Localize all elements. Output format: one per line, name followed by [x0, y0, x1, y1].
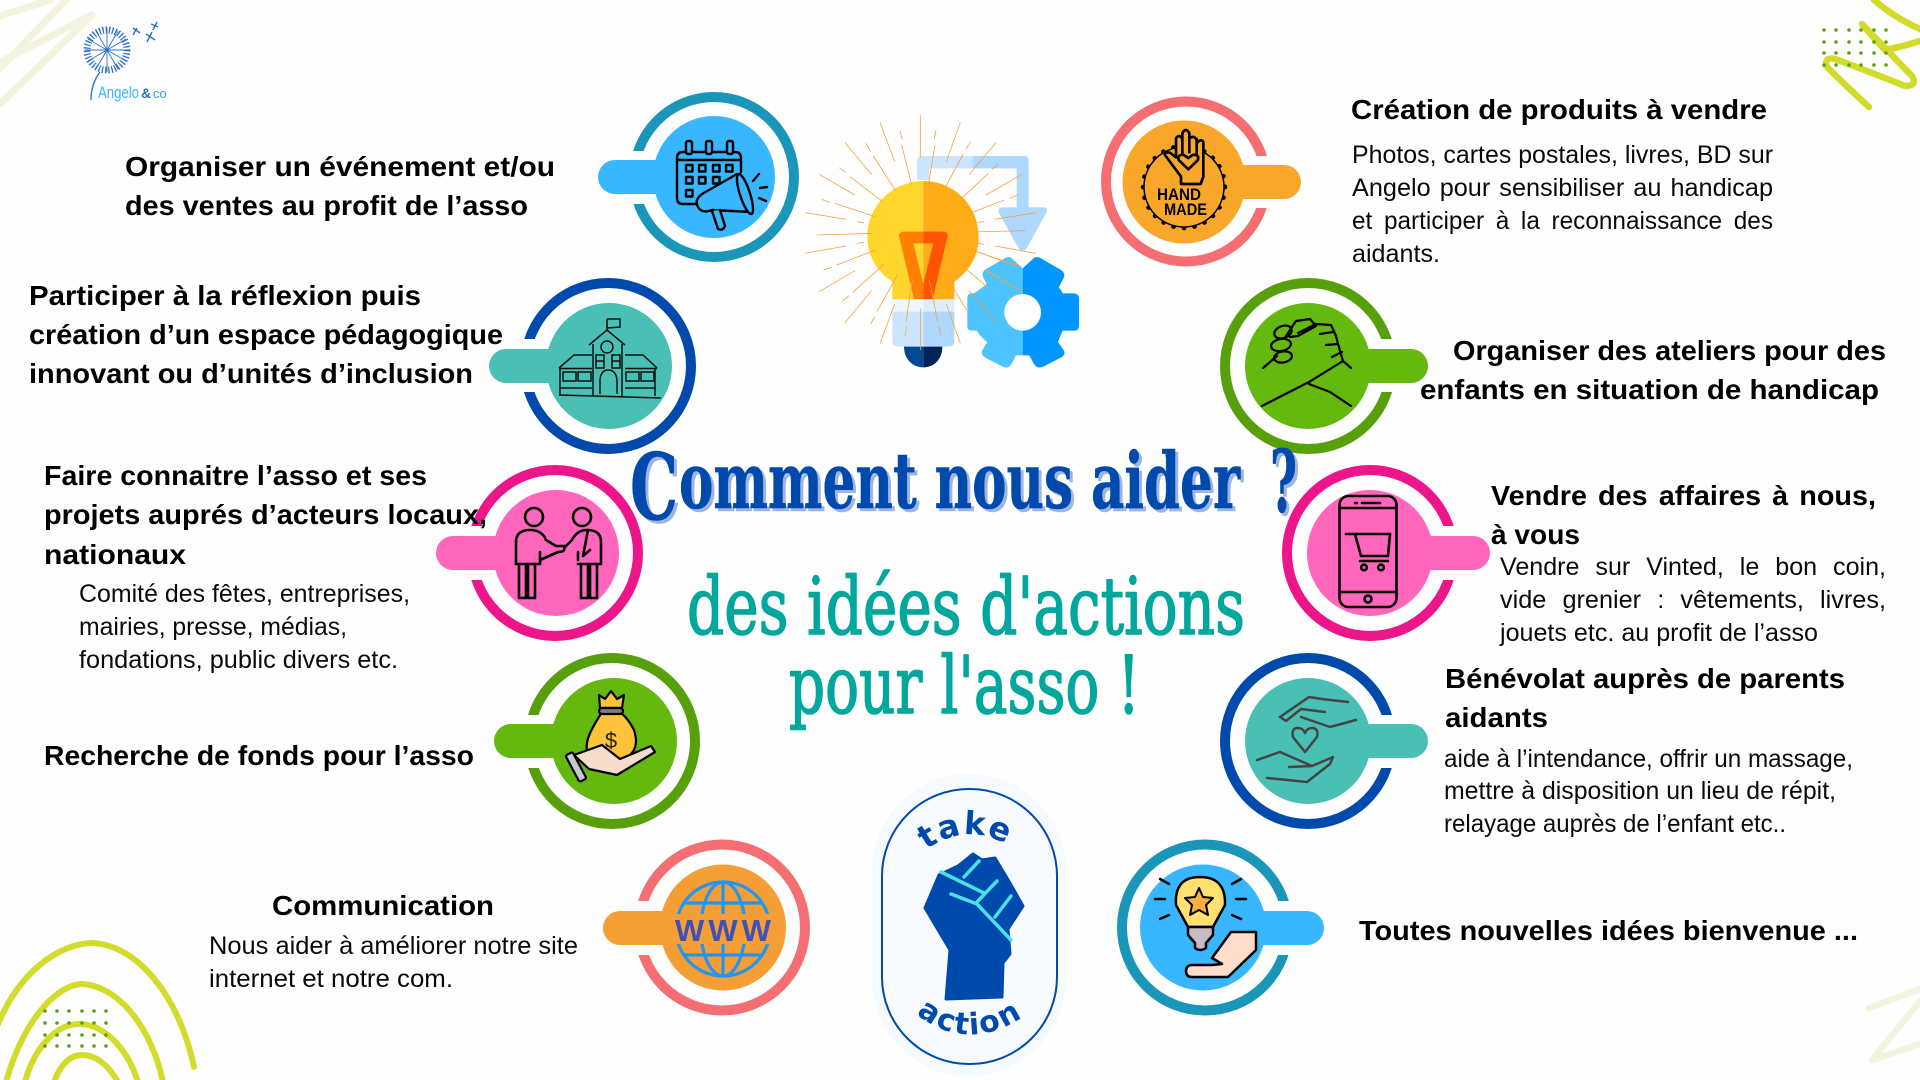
badge: take action: take [917, 810, 1009, 846]
text: benevolat: aidants [1445, 702, 1548, 733]
text: communication: internet et notre com. [209, 965, 453, 993]
badge: take action [872, 774, 1066, 1076]
text: organiser des ateliers: Organiser des ateliers pour des [1453, 335, 1886, 366]
icon: www globe [672, 882, 774, 976]
item 1: event icon circle [598, 97, 794, 257]
text: participer a la reflexion: Participer à la réflexion puis [29, 280, 421, 311]
subtitle: des idees d'actions pour l'asso: des idées d'actions [687, 560, 1245, 653]
text: communication: Communication [272, 890, 494, 921]
text: vendre des affaires: vide grenier : vêtements, livres, [1500, 586, 1886, 614]
item 2: school icon circle [489, 283, 691, 449]
text: faire connaitre l'asso: Faire connaitre l’asso et ses [44, 460, 427, 491]
text: communication [209, 890, 578, 993]
item 7: arm wrestle icon circle [1225, 283, 1428, 449]
item 3: people handshake icon circle [436, 470, 638, 636]
central icon: light bulb with gear and arrow [805, 115, 1079, 368]
text: creation de produits: Photos, cartes postales, livres, BD sur [1352, 141, 1773, 169]
decoration: top right scribble and dots [1822, 0, 1920, 107]
text: vendre des affaires: à vous [1491, 519, 1580, 550]
item 4: money icon circle [494, 658, 695, 824]
text: benevolat: mettre à disposition un lieu de répit, [1444, 777, 1836, 805]
subtitle: des idees d'actions pour l'asso: pour l'asso ! [789, 639, 1140, 732]
text: creation de produits [1351, 94, 1773, 268]
icon: hand made badge [1143, 130, 1225, 228]
title: Comment nous aider ? [630, 432, 1297, 541]
text: communication: Nous aider à améliorer notre site [209, 932, 578, 960]
text: creation de produits: Angelo pour sensibiliser au handicap [1352, 174, 1773, 202]
decoration: bottom left arcs and dots [0, 943, 194, 1080]
item 5: www icon circle [603, 844, 805, 1010]
decoration: top left scribble [0, 0, 92, 104]
text: creation de produits: Création de produits à vendre [1351, 94, 1767, 125]
subtitle: des idees d'actions pour l'asso [687, 560, 1245, 732]
text: faire connaitre l'asso: mairies, presse, médias, [79, 613, 347, 641]
text: benevolat: Bénévolat auprès de parents [1445, 663, 1845, 694]
item 10: idea bulb icon circle [1122, 844, 1324, 1010]
text: vendre des affaires: Vendre sur Vinted, le bon coin, [1500, 553, 1886, 581]
text: participer a la reflexion [29, 280, 503, 389]
text: faire connaitre l'asso: projets auprés d’acteurs locaux, [44, 499, 487, 530]
gear left half [967, 257, 1023, 368]
text: vendre des affaires: Vendre des affaires à nous, [1491, 480, 1876, 511]
text: organiser un evenement [125, 151, 555, 221]
text: benevolat: relayage auprès de l’enfant etc.. [1444, 810, 1786, 838]
text: benevolat: aide à l’intendance, offrir un massage, [1444, 745, 1853, 773]
text: organiser un evenement: des ventes au profit de l’asso [125, 190, 528, 221]
logo: Angelo & co: & [141, 85, 151, 101]
text: recherche de fonds: Recherche de fonds pour l’asso [44, 740, 474, 771]
logo: Angelo & co [85, 22, 167, 102]
text: organiser des ateliers: enfants en situation de handicap [1420, 374, 1879, 405]
text: faire connaitre l'asso: nationaux [44, 539, 186, 570]
text: participer a la reflexion: innovant ou d’unités d’inclusion [29, 358, 473, 389]
text: vendre des affaires: jouets etc. au profit de l’asso [1499, 619, 1818, 647]
icon: hand with star bulb [1155, 877, 1256, 977]
icon: smartphone with cart [1340, 496, 1396, 607]
text: faire connaitre l'asso [44, 460, 487, 674]
text: creation de produits: et participer à la reconnaissance des [1352, 207, 1773, 235]
icon: raised fist [925, 854, 1023, 999]
text: vendre des affaires [1491, 480, 1886, 647]
text: creation de produits: aidants. [1352, 240, 1440, 268]
decoration: bottom right scribble [1869, 989, 1920, 1060]
icon: www globe: WWW [675, 913, 772, 948]
icon: hand made badge: MADE [1164, 200, 1207, 219]
icon: calendar and megaphone [677, 141, 767, 230]
text: faire connaitre l'asso: fondations, public divers etc. [79, 646, 398, 674]
text: organiser un evenement: Organiser un événement et/ou [125, 151, 555, 182]
badge: take action: action [918, 1002, 1020, 1035]
text: faire connaitre l'asso: Comité des fêtes, entreprises, [79, 580, 410, 608]
item 8: phone shopping icon circle [1287, 470, 1490, 636]
icon: hand made badge: HAND [1157, 185, 1201, 204]
item 9: caring hands icon circle [1225, 658, 1428, 824]
logo: Angelo & co: co [153, 86, 167, 101]
item 4: money icon circle: $ [605, 728, 617, 753]
text: participer a la reflexion: création d’un espace pédagogique [29, 319, 503, 350]
title: Comment nous aider ?: omment nous aider [679, 436, 1241, 527]
item 6: handmade icon circle [1106, 102, 1301, 262]
icon: two people shaking hands [516, 508, 601, 598]
icon: hand holding money bag [565, 691, 655, 782]
icon: hands around heart [1257, 697, 1356, 782]
logo: Angelo & co: Angelo [98, 83, 139, 102]
text: toutes nouvelles idees: Toutes nouvelles idées bienvenue ... [1359, 915, 1858, 946]
title: Comment nous aider ?: C [630, 433, 678, 541]
text: organiser des ateliers [1420, 335, 1886, 405]
icon: school building [559, 319, 661, 398]
title: Comment nous aider ?: ? [1270, 432, 1297, 533]
icon: clasped hands [1262, 319, 1351, 406]
text: benevolat [1444, 663, 1853, 838]
